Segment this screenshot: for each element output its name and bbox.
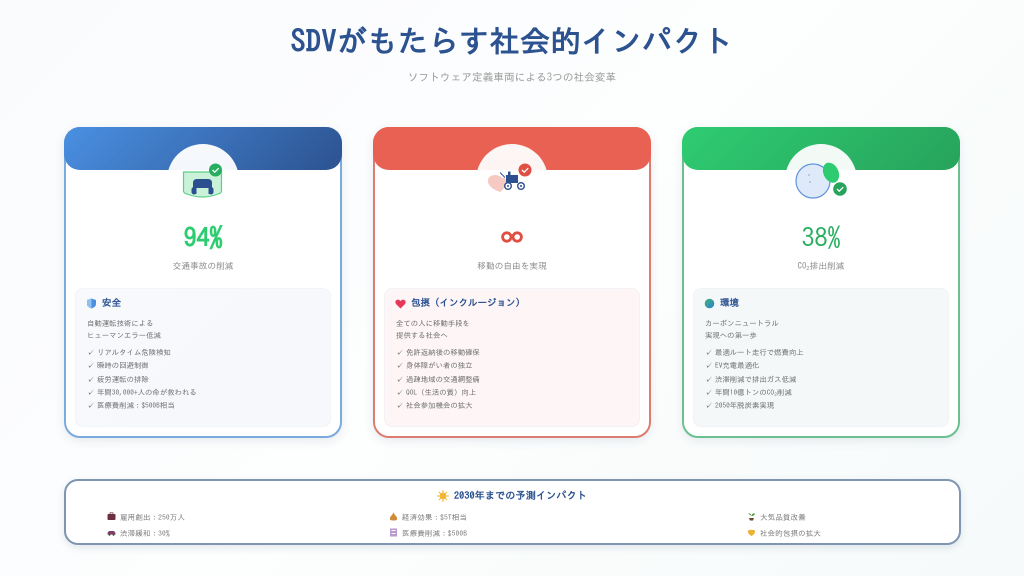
- forecast item: [390, 512, 467, 521]
- icon: heart: [395, 300, 406, 308]
- checklist: ✓: [87, 375, 94, 383]
- checklist: ✓: [396, 388, 403, 396]
- description: カーボンニュートラル: [705, 319, 779, 327]
- checklist: 過疎地域の交通網整備: [406, 375, 480, 383]
- card header: safety: [64, 127, 342, 170]
- checklist: 免許返納後の移動確保: [406, 348, 480, 356]
- stat: 94%: 94%: [184, 225, 222, 251]
- description: 自動運転技術による: [87, 319, 154, 327]
- icon: globe: [704, 298, 714, 308]
- checklist: 医療費削減：$500B相当: [97, 401, 175, 409]
- icon: money bag: [390, 512, 398, 520]
- detail heading: 包摂（インクルージョン）: [411, 299, 525, 308]
- forecast item: [108, 529, 170, 537]
- description: 実現への第一歩: [705, 331, 757, 339]
- stat label: 移動の自由を実現: [477, 262, 547, 271]
- forecast item: [108, 512, 185, 521]
- checklist: 最適ルート走行で燃費向上: [715, 348, 804, 356]
- icon: sun: [437, 490, 449, 502]
- icon backdrop: inclusion: [478, 144, 546, 170]
- title: SDVがもたらす社会的インパクト: [290, 26, 734, 56]
- icon: seedling: [748, 513, 755, 520]
- detail heading: 環境: [720, 299, 739, 308]
- forecast item: [748, 529, 821, 537]
- card header: inclusion: [373, 127, 651, 170]
- checklist: [705, 348, 804, 409]
- icon backdrop: environment: [786, 144, 856, 170]
- icon backdrop: safety: [168, 144, 238, 170]
- panel: safety: [64, 127, 342, 438]
- icon: heart and wheelchair: [488, 164, 532, 192]
- stat label: 交通事故の削減: [173, 262, 233, 271]
- stat: 38%: 38%: [802, 225, 840, 251]
- icon: car: [108, 531, 116, 536]
- panel: 2030 forecast: [64, 479, 961, 545]
- checklist: [87, 348, 197, 409]
- detail box: inclusion: [384, 288, 640, 427]
- description: ヒューマンエラー低減: [87, 331, 161, 339]
- icon: shield with car: [182, 164, 222, 198]
- detail box: safety: [75, 288, 331, 427]
- forecast heading: 2030年までの予測インパクト: [454, 491, 587, 501]
- stat label: CO₂排出削減: [798, 262, 844, 271]
- checklist: ✓: [87, 401, 94, 409]
- description: [87, 319, 161, 339]
- description: [705, 319, 779, 339]
- checklist: 社会参加機会の拡大: [406, 401, 473, 409]
- forecast item: [390, 528, 467, 537]
- checklist: ✓: [87, 348, 94, 356]
- icon: handshake: [748, 530, 756, 536]
- description: 全ての人に移動手段を: [396, 319, 470, 327]
- checklist: ✓: [396, 375, 403, 383]
- icon: shield: [87, 298, 96, 308]
- checklist: ✓: [396, 401, 403, 409]
- item text: 社会的包摂の拡大: [760, 529, 821, 537]
- checklist: 2050年脱炭素実現: [715, 401, 774, 409]
- checklist: 年間30,000+人の命が救われる: [97, 388, 197, 396]
- subtitle: ソフトウェア定義車両による3つの社会変革: [408, 73, 616, 83]
- icon: hospital: [390, 528, 397, 536]
- item text: 経済効果：$5T相当: [402, 513, 467, 521]
- checklist: [396, 348, 480, 409]
- checklist: ✓: [705, 361, 712, 369]
- checklist: ✓: [705, 401, 712, 409]
- panel: inclusion: [373, 127, 651, 438]
- checklist: QOL（生活の質）向上: [406, 388, 476, 396]
- description: 提供する社会へ: [396, 331, 448, 339]
- description: [396, 319, 470, 339]
- icon: briefcase: [108, 512, 116, 520]
- item text: 大気品質改善: [760, 513, 806, 521]
- item text: 医療費削減：$500B: [402, 529, 467, 537]
- checklist: ✓: [87, 361, 94, 369]
- forecast item: [748, 513, 806, 521]
- item text: 渋滞緩和：30%: [120, 529, 170, 537]
- detail box: environment: [693, 288, 949, 427]
- checklist: ✓: [87, 388, 94, 396]
- checklist: 瞬時の回避制御: [97, 361, 149, 369]
- card header: environment: [682, 127, 960, 170]
- checklist: 疲労運転の排除: [97, 375, 149, 383]
- checklist: 年間10億トンのCO₂削減: [715, 388, 792, 396]
- checklist: リアルタイム危険検知: [97, 348, 171, 356]
- checklist: 渋滞削減で排出ガス低減: [715, 375, 796, 383]
- checklist: ✓: [396, 348, 403, 356]
- detail heading: 安全: [102, 299, 121, 308]
- checklist: ✓: [705, 348, 712, 356]
- checklist: 身体障がい者の独立: [406, 361, 473, 369]
- panel: environment: [682, 127, 960, 438]
- stat: infinity: [501, 231, 523, 243]
- checklist: ✓: [705, 388, 712, 396]
- checklist: ✓: [705, 375, 712, 383]
- checklist: EV充電最適化: [715, 361, 759, 369]
- icon: earth with leaf: [795, 162, 847, 199]
- checklist: ✓: [396, 361, 403, 369]
- item text: 雇用創出：250万人: [120, 513, 185, 521]
